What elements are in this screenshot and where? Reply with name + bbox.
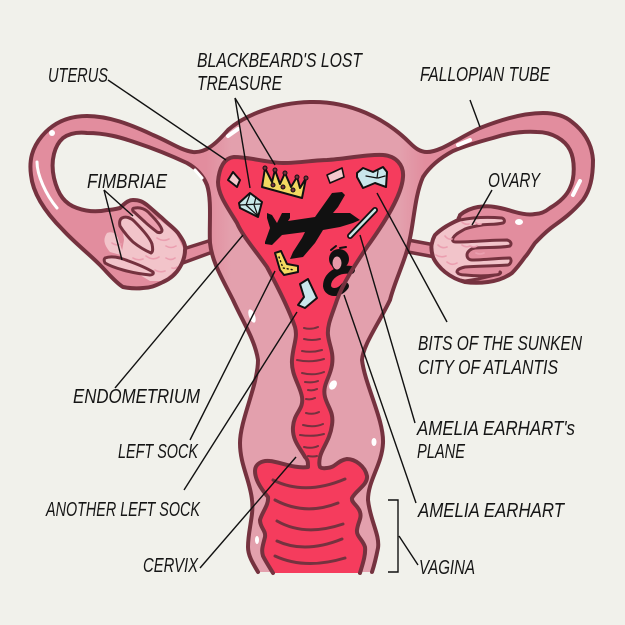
right ovary xyxy=(431,217,511,281)
cavity outline xyxy=(218,155,403,573)
ovary ligaments xyxy=(180,238,435,264)
left ovary xyxy=(104,208,184,281)
label: fallopian tube: FALLOPIAN TUBE xyxy=(420,64,551,86)
canal ridges xyxy=(297,327,324,456)
Amelia Earhart's plane xyxy=(265,192,360,259)
label: uterus: UTERUS xyxy=(48,65,108,87)
treasure: crown xyxy=(262,166,308,198)
uterine cavity and vagina xyxy=(218,155,403,573)
uterus and tubes outline xyxy=(30,102,593,572)
treasure: diamond xyxy=(239,193,262,217)
plane propeller xyxy=(350,210,375,236)
Amelia Earhart figure xyxy=(327,246,351,292)
label: Amelia Earhart's plane: AMELIA EARHART's xyxy=(416,418,575,440)
label: fimbriae: FIMBRIAE xyxy=(87,171,168,193)
label: Amelia Earhart: AMELIA EARHART xyxy=(417,500,565,522)
label: plane line two: PLANE xyxy=(417,441,465,463)
label: endometrium: ENDOMETRIUM xyxy=(73,386,200,408)
label: treasure line two: TREASURE xyxy=(197,73,283,95)
leader lines xyxy=(104,80,492,572)
uterus and fallopian tubes fill xyxy=(30,102,593,572)
diagram: uterus anatomy xyxy=(30,102,593,573)
Atlantis: pink block xyxy=(327,168,344,183)
left sock xyxy=(275,251,298,275)
another left sock xyxy=(298,279,317,308)
vaginal rugae xyxy=(273,479,345,564)
label: left sock: LEFT SOCK xyxy=(118,441,199,463)
label: cervix: CERVIX xyxy=(143,555,198,577)
label: Atlantis line two: CITY OF ATLANTIS xyxy=(418,357,559,379)
highlights xyxy=(37,129,580,544)
label: another left sock: ANOTHER LEFT SOCK xyxy=(45,499,201,521)
label: Blackbeard's lost treasure: BLACKBEARD'S LOST xyxy=(197,50,363,72)
left fimbriae slits xyxy=(133,208,162,233)
label: ovary: OVARY xyxy=(488,170,541,192)
label: vagina: VAGINA xyxy=(419,557,475,579)
label: bits of the sunken city of Atlantis: BITS OF THE SUNKEN xyxy=(418,333,582,355)
Atlantis: blue ruins xyxy=(357,167,387,188)
treasure: small gem xyxy=(228,172,240,187)
